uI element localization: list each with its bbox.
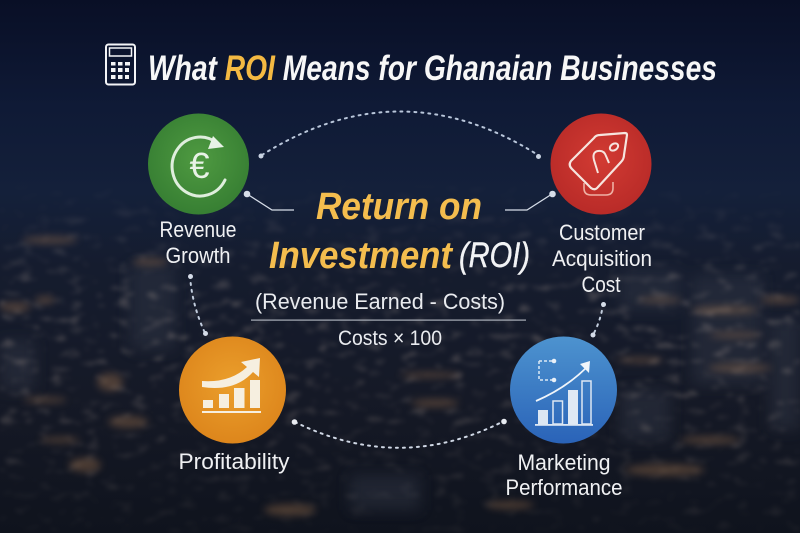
label: Profitability: Profitability	[178, 449, 290, 474]
panel: customer acquisition cost	[550, 114, 652, 297]
label: Customer Acquisition Cost: Cost	[582, 272, 620, 297]
formula: ROI calculation: (Revenue Earned - Costs)	[255, 289, 505, 314]
leader line: right	[505, 191, 556, 210]
panel: revenue growth	[148, 114, 249, 268]
label: Revenue Growth: Revenue	[160, 217, 236, 242]
central heading: Return on Investment (ROI): Investment	[269, 235, 453, 277]
icon: calculator	[106, 44, 135, 84]
leader line: left	[244, 191, 294, 210]
central heading: Return on Investment (ROI)	[269, 186, 530, 277]
label: Customer Acquisition Cost: Customer	[559, 220, 645, 245]
label: Revenue Growth: Growth	[166, 243, 230, 268]
central heading: Return on Investment (ROI): Return on	[316, 186, 482, 228]
icon: green circle with euro	[148, 114, 249, 214]
formula: ROI calculation: Costs × 100	[338, 327, 442, 350]
icon: green circle with euro: €	[189, 145, 210, 186]
dotted connector: revenue to profitability	[188, 274, 208, 336]
panel: profitability	[178, 336, 290, 474]
icon: blue circle with chart	[510, 336, 617, 444]
icon: red circle with price tag	[550, 114, 652, 214]
label: Marketing Performance: Performance	[506, 475, 622, 500]
dotted connector: profitability to marketing	[292, 419, 507, 448]
dotted connector: acquisition cost to marketing	[590, 302, 606, 338]
icon: orange circle with rising bars	[179, 336, 286, 444]
label: Customer Acquisition Cost: Acquisition	[552, 246, 652, 271]
central heading: Return on Investment (ROI): (ROI)	[459, 236, 530, 275]
dotted connector: revenue to acquisition cost	[258, 112, 541, 159]
panel: marketing performance	[506, 336, 622, 500]
label: Marketing Performance: Marketing	[518, 450, 610, 475]
formula: ROI calculation	[251, 289, 526, 350]
